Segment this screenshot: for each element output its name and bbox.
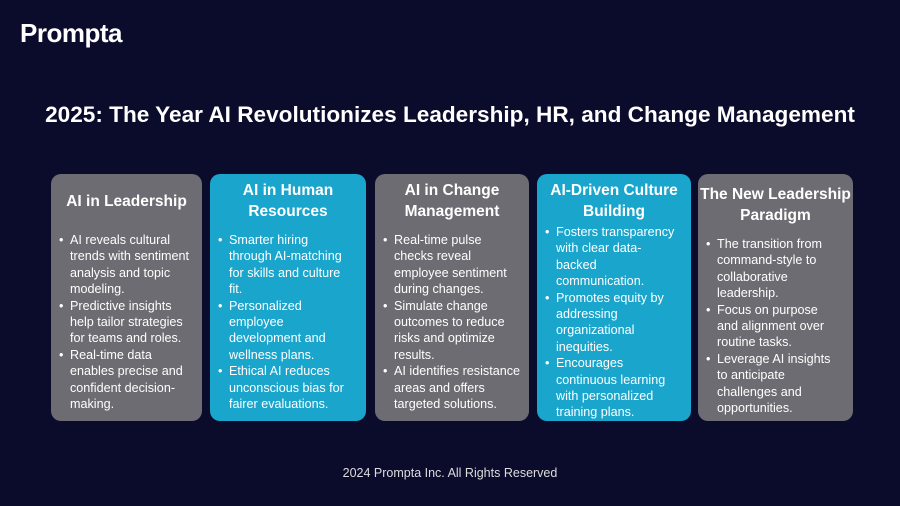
panel: The New Leadership Paradigm: Focus on purpose (717, 303, 818, 317)
panel: AI in Leadership: Real-time data (70, 348, 152, 362)
panel: AI in Human Resources: fit. (229, 282, 242, 296)
panel: AI in Leadership: modeling. (70, 282, 125, 296)
panel: AI in Human Resources: unconscious bias for (229, 381, 344, 395)
panel: AI-Driven Culture Building: Building (583, 203, 645, 220)
panel: The New Leadership Paradigm: Paradigm (740, 207, 811, 224)
panel: The New Leadership Paradigm: collaborative (717, 270, 788, 284)
panel: AI-Driven Culture Building: organizational (556, 323, 634, 337)
panel: The New Leadership Paradigm: leadership. (717, 286, 779, 300)
title: 2025: The Year AI Revolutionizes Leadership, HR, and Change Management (45, 102, 855, 127)
panel: AI in Human Resources: Personalized (229, 299, 302, 313)
panel: AI in Leadership: help tailor strategies (70, 315, 183, 329)
panel: AI in Human Resources: Resources (248, 203, 328, 220)
panel: AI in Human Resources (210, 174, 366, 421)
panel: AI in Human Resources: development and (229, 331, 326, 345)
panel: AI in Change Management (375, 174, 529, 421)
panel: AI-Driven Culture Building: with clear data- (556, 241, 641, 255)
panel: AI in Leadership: analysis and topic (70, 266, 170, 280)
panel: AI in Change Management: Real-time pulse (394, 233, 482, 247)
panel: AI in Change Management: risks and optimize (394, 331, 495, 345)
panel: The New Leadership Paradigm: challenges and (717, 385, 802, 399)
panel: AI-Driven Culture Building: AI-Driven Culture (550, 182, 678, 199)
panel: The New Leadership Paradigm: and alignment over (717, 319, 824, 333)
panel: AI in Change Management: outcomes to reduce (394, 315, 505, 329)
panel: The New Leadership Paradigm: routine tasks. (717, 335, 792, 349)
panel: AI in Change Management: targeted solutions. (394, 397, 497, 411)
panel: AI in Change Management: during changes. (394, 282, 484, 296)
panel: AI-Driven Culture Building: backed (556, 258, 597, 272)
panel: AI in Leadership: making. (70, 397, 114, 411)
panel: AI-Driven Culture Building: continuous learning (556, 373, 665, 387)
panel: AI-Driven Culture Building: training plans. (556, 405, 634, 419)
panel: AI in Human Resources: AI in Human (243, 182, 333, 199)
footer: 2024 Prompta Inc. All Rights Reserved (343, 466, 557, 480)
panel: AI in Human Resources: wellness plans. (229, 348, 314, 362)
panel: The New Leadership Paradigm: The transition from (717, 237, 822, 251)
panel: AI in Change Management: areas and offers (394, 381, 485, 395)
panel: AI in Human Resources: Smarter hiring (229, 233, 308, 247)
panel: AI-Driven Culture Building: Encourages (556, 356, 623, 370)
panel: AI in Human Resources: through AI-matching (229, 249, 342, 263)
panel: AI in Leadership: AI in Leadership (66, 193, 187, 210)
panel: AI in Leadership: Predictive insights (70, 299, 172, 313)
panel: The New Leadership Paradigm (698, 174, 853, 421)
logo: Prompta (20, 18, 122, 48)
panel: The New Leadership Paradigm: The New Leadership (700, 186, 851, 203)
panel: AI in Leadership: enables precise and (70, 364, 183, 378)
panel: AI in Change Management: AI identifies resistance (394, 364, 520, 378)
panel: AI in Leadership: trends with sentiment (70, 249, 189, 263)
panel: AI-Driven Culture Building: Fosters transparency (556, 225, 674, 239)
panel: The New Leadership Paradigm: command-style to (717, 253, 816, 267)
panel: AI in Change Management: Management (405, 203, 499, 220)
panel: AI in Change Management: AI in Change (405, 182, 499, 199)
panel: AI in Leadership: AI reveals cultural (70, 233, 170, 247)
panel: AI-Driven Culture Building: communication. (556, 274, 644, 288)
panel: AI in Leadership: confident decision- (70, 381, 175, 395)
panel: The New Leadership Paradigm: opportunities. (717, 401, 793, 415)
panel: AI in Leadership (51, 174, 202, 421)
panel: AI in Change Management: employee sentiment (394, 266, 507, 280)
panel: AI-Driven Culture Building: with personalized (556, 389, 653, 403)
panel: AI-Driven Culture Building: Promotes equity by (556, 291, 664, 305)
panel: AI in Human Resources: for skills and culture (229, 266, 340, 280)
panel: AI in Change Management: results. (394, 348, 435, 362)
panel: The New Leadership Paradigm: Leverage AI insights (717, 352, 830, 366)
panel: AI-Driven Culture Building: addressing (556, 307, 618, 321)
panel: AI in Human Resources: fairer evaluations. (229, 397, 328, 411)
panel: AI in Change Management: checks reveal (394, 249, 471, 263)
panel: AI-Driven Culture Building (537, 174, 691, 421)
panel: AI in Change Management: Simulate change (394, 299, 488, 313)
panel: AI in Leadership: for teams and roles. (70, 331, 181, 345)
panel: AI in Human Resources: Ethical AI reduces (229, 364, 330, 378)
panel: AI-Driven Culture Building: inequities. (556, 340, 613, 354)
panel: AI in Human Resources: employee (229, 315, 284, 329)
panel: The New Leadership Paradigm: to anticipate (717, 368, 785, 382)
